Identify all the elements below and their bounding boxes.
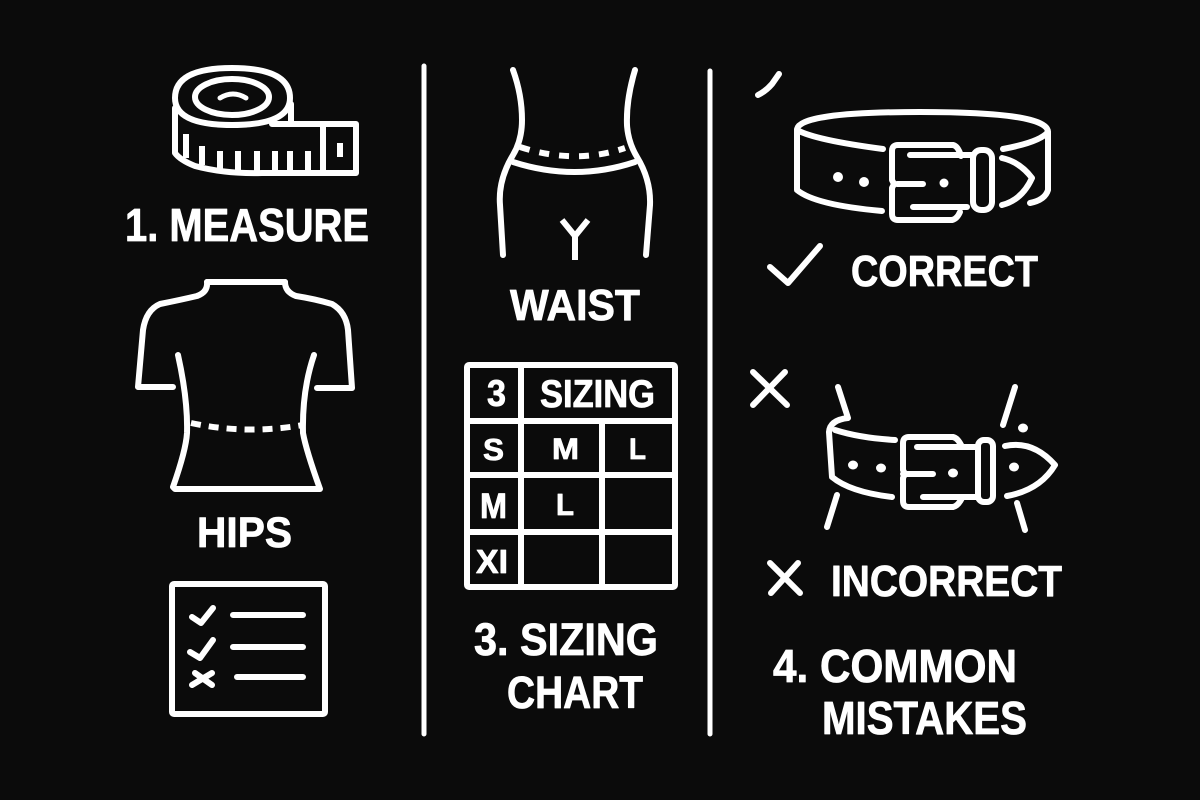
heading: 3. Sizing chart: CHART [507, 667, 643, 718]
sizing table: XI [476, 543, 508, 580]
label: incorrect: INCORRECT [831, 557, 1062, 606]
icon: cross small [770, 563, 800, 593]
icon: measuring tape [175, 68, 356, 173]
sizing table: M [552, 433, 579, 466]
heading: 4. Common mistakes: 4. COMMON [773, 640, 1017, 692]
icon: small tick mark [758, 74, 779, 95]
label: waist: WAIST [510, 281, 640, 330]
icon: checklist [172, 584, 325, 714]
icon: correctly fastened belt [797, 112, 1048, 220]
sizing table: 3 [487, 373, 506, 414]
sizing table [467, 365, 675, 587]
heading: 3. Sizing chart: 3. SIZING [474, 614, 658, 665]
sizing table: S [483, 432, 504, 467]
sizing table: L [556, 487, 574, 522]
heading: 4. Common mistakes: MISTAKES [822, 692, 1027, 744]
icon: check [770, 246, 820, 283]
sizing table: L [629, 433, 646, 466]
icon: torso with hips line [138, 282, 352, 489]
label: hips: HIPS [197, 509, 292, 557]
icon: incorrectly fastened belt [827, 387, 1055, 530]
heading: 1. Measure: 1. MEASURE [125, 199, 369, 251]
sizing table: SIZING [540, 373, 655, 416]
heading: 4. Common mistakes [773, 640, 1027, 744]
heading: 3. Sizing chart [474, 614, 658, 718]
icon: cross [753, 372, 787, 405]
icon: waist diagram [500, 70, 650, 260]
label: correct: CORRECT [851, 247, 1038, 296]
sizing table: M [480, 487, 507, 526]
